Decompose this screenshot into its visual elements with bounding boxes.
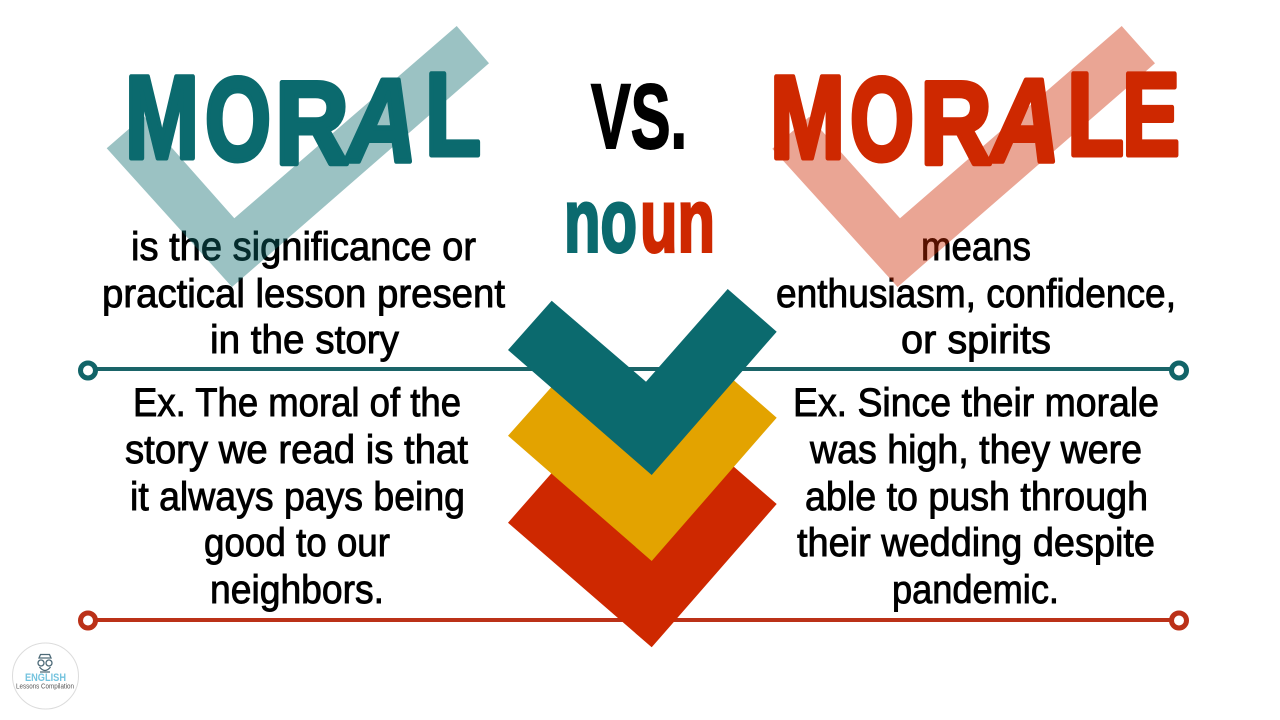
- icon: red translucent check mark: [772, 26, 1155, 287]
- red divider line with end markers: [80, 613, 1186, 628]
- title: MORALE: M: [770, 52, 845, 184]
- definition of morale: enthusiasm, confidence,: [776, 272, 1176, 316]
- title: MORALE: [770, 49, 1180, 190]
- title: MORALE: O: [850, 54, 914, 186]
- definition of morale: [776, 225, 1176, 362]
- example sentence for moral: [125, 381, 468, 612]
- definition of moral: is the significance or: [131, 225, 476, 269]
- logo: English Lessons Compilation: [12, 643, 78, 709]
- red chevron: [508, 461, 777, 647]
- example sentence for moral: good to our: [204, 521, 390, 565]
- example sentence for moral: story we read is that: [125, 428, 468, 472]
- title: MORALE: L: [1067, 49, 1124, 181]
- title: MORAL: M: [125, 52, 199, 184]
- title: MORAL: R: [275, 58, 349, 190]
- title: MORAL: [125, 49, 481, 190]
- definition of moral: [102, 225, 505, 362]
- example sentence for morale: Ex. Since their morale: [793, 381, 1159, 425]
- title: MORAL: A: [345, 55, 417, 187]
- example sentence for moral: Ex. The moral of the: [133, 381, 461, 425]
- example sentence for morale: was high, they were: [809, 428, 1142, 472]
- definition of moral: practical lesson present: [102, 272, 505, 316]
- example sentence for morale: [793, 381, 1159, 612]
- heading: noun: no: [564, 172, 637, 272]
- example sentence for moral: neighbors.: [210, 568, 384, 612]
- icon: character with glasses: [38, 654, 52, 672]
- example sentence for morale: able to push through: [805, 475, 1148, 519]
- title: MORALE: E: [1122, 49, 1180, 181]
- logo wordmark: ENGLISH: [25, 672, 66, 684]
- title: MORALE: A: [989, 55, 1060, 187]
- definition of morale: or spirits: [901, 318, 1051, 362]
- teal divider line with end markers: [80, 363, 1186, 378]
- heading: VS.: VS.: [591, 66, 687, 168]
- title: MORAL: O: [205, 54, 271, 186]
- title: MORALE: R: [920, 58, 992, 190]
- example sentence for morale: their wedding despite: [797, 521, 1155, 565]
- definition of morale: means: [921, 225, 1031, 269]
- yellow chevron: [508, 375, 777, 561]
- heading: noun: un: [640, 172, 715, 272]
- title: MORAL: L: [425, 49, 481, 181]
- definition of moral: in the story: [210, 318, 399, 362]
- teal chevron: [508, 289, 777, 475]
- example sentence for moral: it always pays being: [130, 475, 465, 519]
- example sentence for morale: pandemic.: [892, 568, 1059, 612]
- logo tagline: Lessons Compilation: [16, 682, 74, 690]
- icon: teal translucent check mark: [107, 26, 489, 287]
